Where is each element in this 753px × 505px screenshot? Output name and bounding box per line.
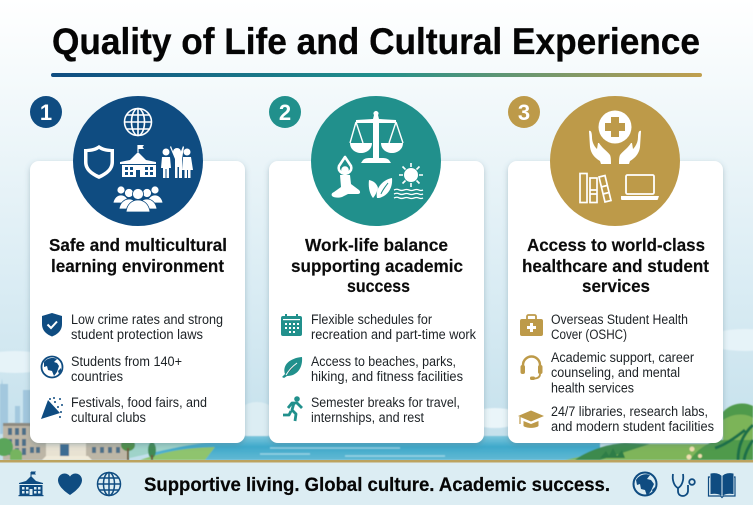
heading: Safe and multicultural [49, 235, 227, 255]
card 1 background [30, 161, 245, 443]
footer icon: heart [58, 473, 82, 495]
icon circle: safety and community [73, 96, 203, 226]
footer icon: school [18, 472, 44, 496]
heading [49, 235, 227, 276]
item: festivals [41, 395, 207, 426]
heading: success [347, 276, 410, 296]
item: crime rates: Low crime rates and strong [71, 312, 223, 328]
footer icon: globe [98, 472, 120, 496]
item: schedules: Flexible schedules for [311, 312, 432, 328]
number badge 3 [508, 96, 540, 128]
item: festivals: cultural clubs [71, 410, 146, 426]
item: academic support: health services [551, 380, 634, 396]
item: students: Students from 140+ [71, 354, 182, 370]
footer icon: earth [634, 472, 656, 496]
panel: safe and multicultural [30, 96, 245, 443]
heading: learning environment [51, 256, 224, 276]
item: breaks [283, 395, 460, 426]
item: academic support: Academic support, career [551, 350, 694, 366]
number badge 1: 1 [40, 100, 52, 125]
number badge 1 [30, 96, 62, 128]
heading: services [582, 276, 650, 296]
heading: healthcare and student [522, 256, 709, 276]
number badge 2: 2 [279, 100, 291, 125]
card 2 background [269, 161, 484, 443]
heading [522, 235, 709, 296]
item: nature [282, 354, 463, 385]
item: students: countries [71, 369, 123, 385]
item: libraries [518, 404, 714, 435]
footer band [0, 462, 753, 505]
number badge 2 [269, 96, 301, 128]
item: schedules [281, 312, 477, 343]
footer tagline: Supportive living. Global culture. Academic success. [144, 474, 610, 496]
item: libraries: and modern student facilities [551, 419, 714, 435]
item: festivals: Festivals, food fairs, and [71, 395, 207, 411]
item: nature: hiking, and fitness facilities [311, 369, 463, 385]
item: health cover: Overseas Student Health [551, 312, 688, 328]
item: health cover [520, 312, 688, 343]
card 3 background [508, 161, 723, 443]
item: libraries: 24/7 libraries, research labs, [551, 404, 708, 420]
landscape scenery [0, 329, 753, 460]
icon circle: balance and wellness [311, 96, 441, 226]
panel: healthcare and services [508, 96, 723, 443]
item: health cover: Cover (OSHC) [551, 327, 627, 343]
panel: work-life balance [269, 96, 484, 443]
heading: Access to world-class [527, 235, 705, 255]
icon circle: healthcare and study [550, 96, 680, 226]
item: students [42, 354, 182, 385]
footer icon: book [708, 474, 735, 498]
number badge 3: 3 [518, 100, 530, 125]
heading [291, 235, 463, 296]
title: Quality of Life and Cultural Experience [52, 21, 700, 62]
item: breaks: Semester breaks for travel, [311, 395, 460, 411]
item: schedules: recreation and part-time work [311, 327, 477, 343]
item: crime rates [42, 312, 223, 343]
item: breaks: internships, and rest [311, 410, 424, 426]
footer icon: stethoscope [673, 474, 695, 496]
item: academic support: counseling, and mental [551, 365, 680, 381]
item: academic support [520, 350, 694, 396]
item: crime rates: student protection laws [71, 327, 203, 343]
heading: Work-life balance [305, 235, 448, 255]
title rule [51, 73, 702, 77]
item: nature: Access to beaches, parks, [311, 354, 456, 370]
heading: supporting academic [291, 256, 463, 276]
